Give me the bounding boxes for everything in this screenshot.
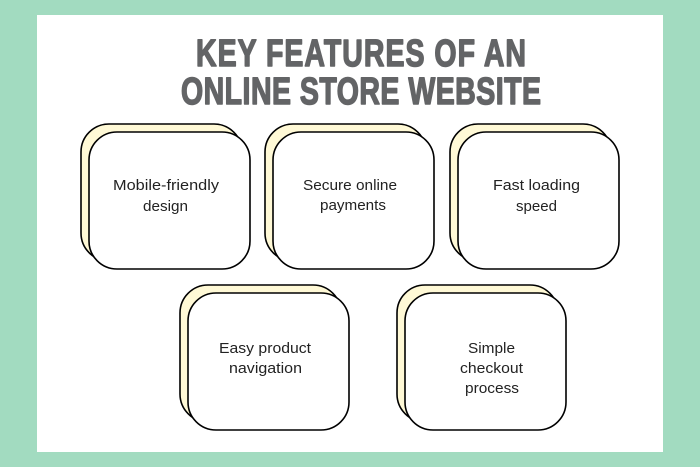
card: mobile-friendly design: design bbox=[143, 198, 188, 215]
card: secure online payments bbox=[265, 124, 434, 269]
card: fast loading speed: speed bbox=[516, 198, 557, 215]
card: easy product navigation: navigation bbox=[229, 360, 302, 377]
title bbox=[181, 33, 541, 113]
card: simple checkout process: checkout bbox=[460, 360, 524, 377]
card: simple checkout process bbox=[397, 285, 566, 430]
card: easy product navigation: Easy product bbox=[219, 340, 312, 357]
card: fast loading speed bbox=[450, 124, 619, 269]
card: simple checkout process: process bbox=[465, 380, 519, 397]
title: ONLINE STORE WEBSITE bbox=[181, 71, 541, 113]
card: simple checkout process: Simple bbox=[468, 340, 515, 357]
card: fast loading speed: Fast loading bbox=[493, 177, 580, 194]
card: secure online payments: payments bbox=[320, 197, 386, 214]
card: easy product navigation bbox=[180, 285, 349, 430]
title: KEY FEATURES OF AN bbox=[196, 33, 526, 75]
card: mobile-friendly design bbox=[81, 124, 250, 269]
card: secure online payments: Secure online bbox=[303, 177, 397, 194]
card: mobile-friendly design: Mobile-friendly bbox=[113, 177, 220, 194]
